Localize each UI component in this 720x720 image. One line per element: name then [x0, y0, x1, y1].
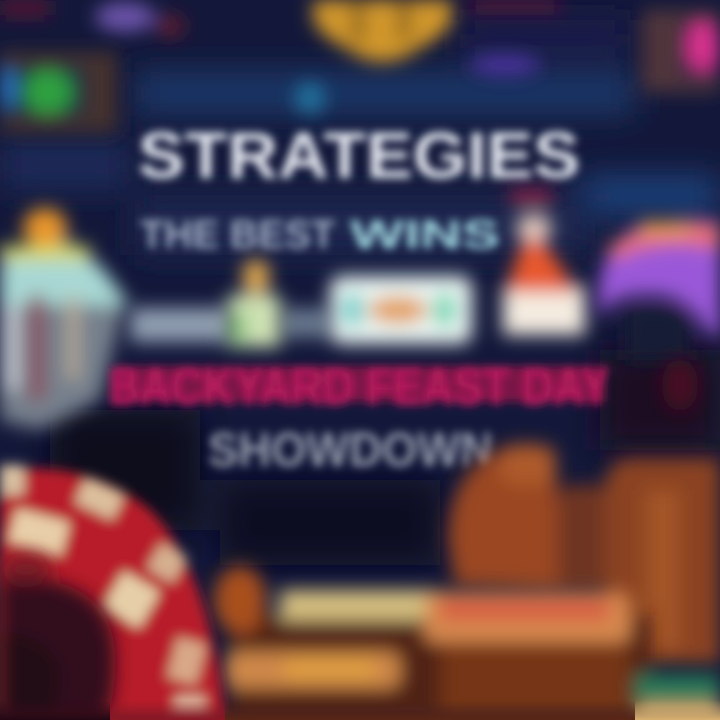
right rainbow arch [598, 220, 720, 360]
grey subline: SHOWDOWN [208, 424, 493, 477]
small blue icon [294, 82, 326, 114]
central white teal panel [330, 276, 472, 344]
top left stadium lights [0, 0, 560, 76]
left green screen [0, 52, 117, 132]
right pink screen [642, 10, 720, 92]
red spot on right [662, 359, 698, 411]
yellow green figure [228, 259, 280, 347]
pink headline: BACKYARD FEAST DAY [108, 357, 610, 417]
row: label middle [130, 308, 330, 342]
bottom edge table shading [0, 700, 720, 720]
background bands [0, 20, 720, 565]
left rainbow tower [0, 208, 130, 430]
dark bowl at lower left [0, 554, 115, 720]
subtitle line: THE BEST [140, 213, 335, 257]
title: STRATEGIES [138, 118, 580, 192]
subtitle line [140, 213, 500, 257]
checkered tablecloth [0, 465, 225, 720]
top scoreboard: gold lights [312, 0, 453, 62]
subtitle line: WINS [350, 213, 500, 257]
red orange white figure [503, 190, 585, 335]
fried food stacks at right [448, 444, 720, 663]
table with plates [214, 566, 720, 720]
